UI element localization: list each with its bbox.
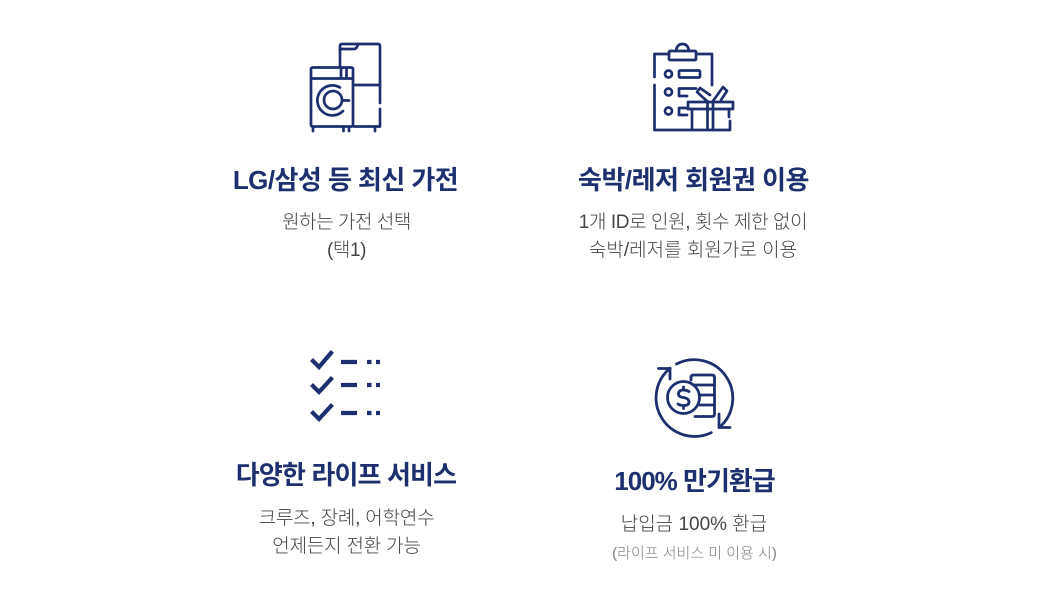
- heading: refund: 100% 만기환급: [614, 466, 775, 496]
- icon: clipboard with gift: [653, 42, 734, 132]
- text: membership description: [579, 212, 807, 261]
- heading: life services: 다양한 라이프 서비스: [236, 460, 456, 490]
- icon: coins with circular arrows: [654, 358, 734, 438]
- text: appliances description: (택1): [327, 240, 366, 261]
- text: refund note: (라이프 서비스 미 이용 시): [612, 545, 777, 562]
- panel: life services: [236, 460, 456, 557]
- icon: washer and refrigerator: [310, 42, 382, 132]
- text: refund description: 납입금 100% 환급: [621, 514, 767, 535]
- heading: membership: 숙박/레저 회원권 이용: [578, 165, 809, 195]
- panel: refund: [612, 466, 777, 562]
- panel: appliances: [233, 165, 458, 261]
- text: membership description: 숙박/레저를 회원가로 이용: [589, 240, 797, 261]
- heading: appliances: LG/삼성 등 최신 가전: [233, 165, 458, 195]
- text: appliances description: 원하는 가전 선택: [282, 212, 411, 233]
- text: appliances description: [282, 212, 411, 261]
- text: membership description: 1개 ID로 인원, 횟수 제한 없이: [579, 212, 807, 233]
- icon: checklist: [310, 350, 380, 422]
- panel: membership: [578, 165, 809, 261]
- text: life services description: 언제든지 전환 가능: [272, 536, 421, 557]
- text: life services description: 크루즈, 장례, 어학연수: [259, 508, 434, 529]
- text: life services description: [259, 508, 434, 557]
